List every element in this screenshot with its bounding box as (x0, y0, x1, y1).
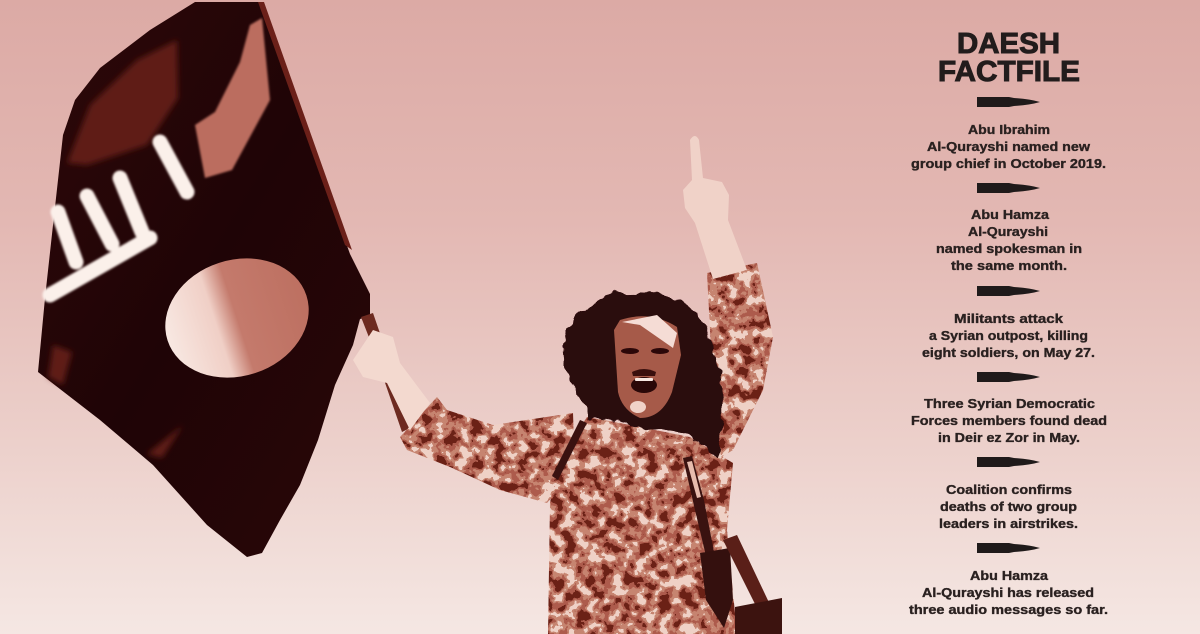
title: DAESH (957, 28, 1060, 60)
bullet divider 6 (977, 543, 1040, 553)
fact 6: Al-Qurayshi has released (922, 586, 1094, 600)
flag disc (150, 240, 324, 396)
flag pale marks (50, 142, 187, 295)
fact 6 (909, 569, 1108, 617)
fact 4: Three Syrian Democratic (924, 397, 1095, 411)
figure: raised forearm and hand (683, 136, 747, 279)
figure: strap highlight (687, 461, 701, 498)
fact 2: named spokesman in (936, 242, 1082, 256)
fact 4: Forces members found dead (911, 414, 1107, 428)
fact 5: leaders in airstrikes. (939, 517, 1078, 531)
figure: teeth (635, 378, 653, 381)
fact 3 (922, 312, 1095, 360)
fact 3: eight soldiers, on May 27. (922, 346, 1095, 360)
bullet divider 3 (977, 286, 1040, 296)
fact 2: Abu Hamza (971, 208, 1050, 222)
flag edge band (258, 2, 352, 250)
fact 3: a Syrian outpost, killing (929, 329, 1088, 343)
bullet divider 5 (977, 457, 1040, 467)
figure: weapon (723, 535, 782, 634)
fact 6: Abu Hamza (970, 569, 1049, 583)
figure: eyes (621, 348, 669, 354)
figure (353, 136, 782, 634)
fact 4: in Deir ez Zor in May. (938, 431, 1080, 445)
figure: raised sleeve (707, 263, 773, 460)
fact 5: Coalition confirms (946, 483, 1072, 497)
figure: other sleeve (400, 397, 575, 503)
fact 5: deaths of two group (940, 500, 1077, 514)
fact 2 (936, 208, 1082, 273)
title: FACTFILE (938, 56, 1080, 88)
fact 1: Al-Qurayshi named new (927, 140, 1090, 154)
figure: torso (548, 417, 737, 634)
figure: chin highlight (630, 401, 646, 413)
fact 2: the same month. (951, 259, 1067, 273)
figure: hair (563, 292, 723, 457)
fact 6: three audio messages so far. (909, 603, 1108, 617)
bullet divider 1 (977, 97, 1040, 107)
fact 2: Al-Qurayshi (968, 225, 1048, 239)
fact 1: group chief in October 2019. (911, 157, 1106, 171)
figure: face (614, 316, 681, 418)
figure: lowered forearm and hand (353, 330, 430, 430)
bullet divider 4 (977, 372, 1040, 382)
flag (38, 2, 370, 557)
title (938, 28, 1080, 88)
figure: chest strap (683, 456, 714, 556)
flag fabric folds (48, 40, 183, 458)
figure: left strap (552, 420, 587, 480)
figure: nose and moustache (632, 369, 656, 376)
fact 4 (911, 397, 1107, 445)
bullet divider 2 (977, 183, 1040, 193)
flag pole (361, 313, 410, 432)
figure: forehead highlight (622, 315, 677, 348)
factfile column (909, 28, 1108, 617)
figure: holster (700, 548, 733, 628)
fact 1 (911, 123, 1106, 171)
fact 1: Abu Ibrahim (968, 123, 1050, 137)
figure: mouth (631, 377, 657, 393)
flag upper mark (195, 18, 270, 178)
fact 5 (939, 483, 1078, 531)
fact 3: Militants attack (954, 312, 1063, 326)
figure: weapon plate (735, 598, 782, 634)
